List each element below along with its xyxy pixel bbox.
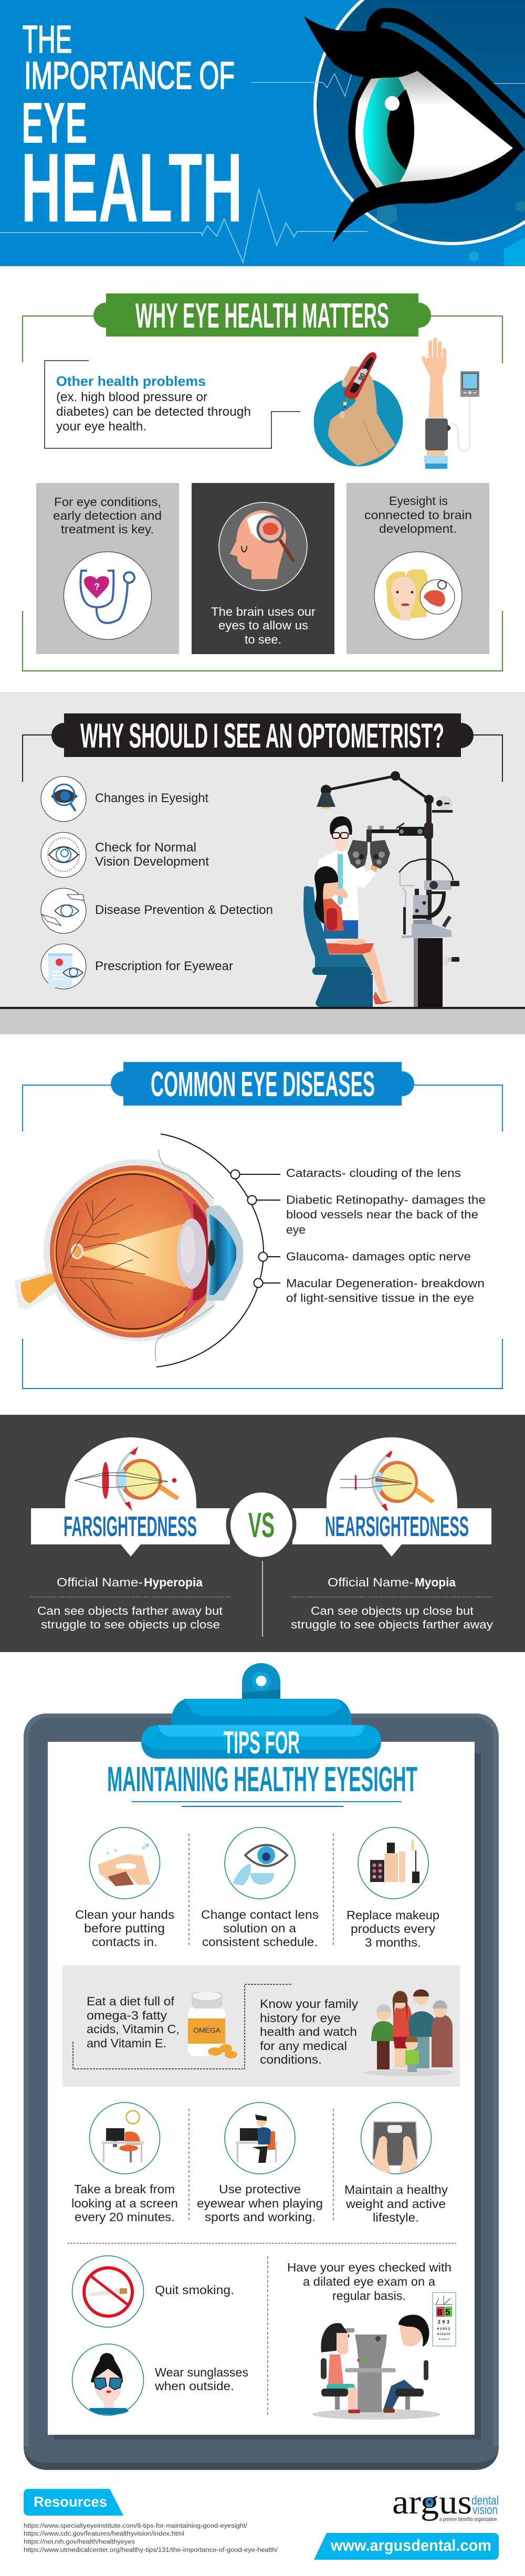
- chart: eye test card: 814236: [437, 2333, 450, 2336]
- tip: take a break: looking at a screen: [71, 2196, 178, 2210]
- icon: farsighted eye diagram: [75, 1449, 180, 1508]
- icon: glucose meter in hands: 90: [356, 372, 367, 382]
- column: farsightedness: Can see objects farther away but: [37, 1604, 223, 1617]
- callout: other health problems: (ex. high blood pressure or: [56, 390, 207, 404]
- panel: why eye health matters: [23, 293, 502, 671]
- list item: changes in eyesight: [41, 776, 208, 822]
- icon: washing hands: [89, 1827, 160, 1899]
- tip: clean hands: contacts in.: [92, 1935, 158, 1949]
- column: farsightedness: [31, 1437, 231, 1631]
- badge: resources: Resources: [34, 2494, 107, 2510]
- list item: prescription for eyewear: Prescription for Eyewear: [95, 959, 233, 973]
- logo: argus dental vision: a premier benefits organization: [439, 2517, 497, 2522]
- panel: diet and family history: [62, 1965, 460, 2087]
- icon: arm with blood pressure monitor: [421, 338, 479, 469]
- callout: other health problems: [45, 361, 300, 448]
- callout: other health problems: Other health problems: [56, 373, 206, 389]
- illustration: optometrist examining patient: [303, 771, 459, 1007]
- tip: quit smoking: [72, 2256, 234, 2327]
- tip: contact lens solution: Change contact lens: [201, 1908, 319, 1921]
- panel: diet and family history: health and watch: [260, 2025, 357, 2038]
- title: THE: [23, 18, 72, 61]
- icon: heartbeat line: [0, 73, 525, 262]
- list item: disease prevention and detection: Disease Prevention & Detection: [95, 903, 273, 917]
- icon: family: [364, 1990, 454, 2076]
- panel: diet and family history: Eat a diet full of: [87, 1994, 174, 2008]
- logo: argus dental vision: vision: [472, 2503, 498, 2517]
- panel: farsightedness vs nearsightedness: [0, 1415, 525, 1652]
- panel: diet and family history: acids, Vitamin C,: [87, 2022, 180, 2036]
- callout: other health problems: your eye health.: [56, 419, 146, 434]
- chart: eye test card: 5: [445, 2307, 450, 2317]
- tip: dilated eye exam: [287, 2260, 456, 2420]
- chart: eye test card: 63952: [437, 2328, 450, 2331]
- column: farsightedness: FARSIGHTEDNESS: [64, 1511, 197, 1542]
- callout: other health problems: diabetes) can be detected through: [56, 405, 251, 419]
- badge: website: [314, 2533, 499, 2560]
- panel: diet and family history: conditions.: [260, 2053, 322, 2066]
- text: resource links: https://www.utmedicalcenter.org/healthy-tips/131/the-importance-of-good-eye-health/: [24, 2547, 278, 2553]
- badge: VS: VS: [248, 1506, 275, 1545]
- icon: feet on scale: [361, 2102, 432, 2174]
- tip: replace makeup: products every: [351, 1922, 435, 1936]
- tip: clean hands: Clean your hands: [75, 1908, 174, 1921]
- tip: protective eyewear: [197, 2102, 323, 2224]
- text: resource links: https://www.specialtyeyeinstitute.com/6-tips-for-maintaining-good-eyesight/: [24, 2523, 248, 2529]
- text: disease list: eye: [286, 1223, 306, 1236]
- icon: glucose meter in hands: [314, 352, 403, 466]
- list item: disease prevention and detection: [41, 888, 273, 933]
- patient and chair: [303, 866, 394, 1007]
- panel: diet and family history: history for eye: [260, 2011, 341, 2025]
- icon: no smoking: [72, 2256, 144, 2327]
- icon: eye with dotted ring: [41, 833, 86, 878]
- badge: website: www.argusdental.com: [330, 2536, 491, 2554]
- slit lamp: [399, 859, 459, 938]
- tip: clean hands: before putting: [84, 1921, 165, 1935]
- tip: contact lens solution: solution on a: [223, 1921, 297, 1935]
- tip: replace makeup: [346, 1827, 439, 1949]
- panel: common eye diseases: [14, 1062, 502, 1389]
- card: brain uses eyes: eyes to allow us: [218, 618, 308, 632]
- panel: diet and family history: Know your family: [260, 1997, 358, 2011]
- text: disease list: [286, 1166, 486, 1305]
- footer: resources: [24, 2489, 278, 2553]
- badge: resources: [24, 2489, 123, 2516]
- card: eyesight and brain development: connected to brain: [364, 508, 472, 522]
- logo: argus dental vision: dental: [471, 2494, 499, 2508]
- icon: stethoscope with heart: [64, 552, 151, 639]
- column: farsightedness: Official Name-: [57, 1575, 143, 1589]
- tip: contact lens solution: consistent schedule.: [202, 1935, 318, 1949]
- panel: tips clipboard: [24, 1663, 499, 2470]
- tip: replace makeup: Replace makeup: [346, 1908, 439, 1922]
- list item: check for normal vision development: Vision Development: [95, 855, 209, 869]
- logo: argus dental vision: argus: [392, 2483, 472, 2521]
- column: nearsightedness: struggle to see objects farther away: [291, 1618, 493, 1631]
- tip: protective eyewear: Use protective: [219, 2182, 301, 2196]
- list item: changes in eyesight: Changes in Eyesight: [95, 791, 208, 805]
- list item: check for normal vision development: Check for Normal: [95, 840, 196, 855]
- card: early detection: early detection and: [53, 509, 162, 522]
- card: brain uses eyes: The brain uses our: [211, 605, 316, 618]
- panel: why should I see an optometrist: [0, 692, 525, 1034]
- icon: woman with brain thought: [374, 552, 462, 639]
- panel: diet and family history: for any medical: [260, 2039, 347, 2053]
- icon: eye and contact lens case: [225, 1827, 295, 1899]
- heading: common eye diseases: [111, 1062, 414, 1106]
- list item: prescription for eyewear: [41, 944, 233, 989]
- tip: healthy weight: weight and active: [345, 2197, 446, 2211]
- tip: protective eyewear: eyewear when playing: [197, 2196, 323, 2210]
- tip: dilated eye exam: a dilated eye exam on a: [303, 2275, 436, 2288]
- icon: omega bottle: [188, 1992, 237, 2058]
- tip: take a break: every 20 minutes.: [75, 2210, 175, 2224]
- tip: contact lens solution: [201, 1827, 319, 1949]
- title: IMPORTANCE OF: [24, 55, 235, 97]
- illustration: eye exam: [312, 2293, 456, 2420]
- icon: magnified eye: [41, 776, 86, 822]
- text: disease list: Diabetic Retinopathy- damages the: [286, 1193, 486, 1206]
- card: brain uses eyes: to see.: [245, 633, 281, 646]
- icon: omega bottle: OMEGA: [193, 2026, 220, 2034]
- text: disease list: of light-sensitive tissue in the eye: [286, 1291, 474, 1305]
- icon: makeup products: [358, 1827, 428, 1899]
- logo: argus dental vision: [392, 2483, 499, 2522]
- hero panel: [0, 0, 525, 266]
- clipboard board: [24, 1713, 499, 2470]
- icon: hands protecting eye: [41, 888, 86, 933]
- tip: dilated eye exam: regular basis.: [332, 2289, 406, 2302]
- card: early detection: [36, 483, 179, 654]
- card: eyesight and brain development: Eyesight is: [389, 494, 448, 508]
- diagram: callout arc with markers: [156, 1134, 280, 1367]
- column: nearsightedness: Myopia: [415, 1575, 456, 1589]
- column: farsightedness: Hyperopia: [144, 1575, 203, 1589]
- card: eyesight and brain development: [346, 483, 489, 654]
- tip: replace makeup: 3 months.: [365, 1936, 421, 1949]
- tip: wear sunglasses: when outside.: [154, 2379, 234, 2393]
- heading: why eye health matters: [93, 293, 431, 337]
- chart: eye test card: 8: [437, 2307, 442, 2317]
- icon: nearsighted eye diagram: [340, 1452, 435, 1510]
- card: brain uses eyes: [192, 483, 334, 654]
- column: farsightedness: struggle to see objects up close: [41, 1618, 220, 1631]
- column: nearsightedness: Can see objects up close but: [311, 1604, 474, 1617]
- tip: wear sunglasses: [72, 2344, 248, 2415]
- tip: healthy weight: Maintain a healthy: [344, 2183, 448, 2196]
- tip: clean hands: [75, 1827, 174, 1949]
- card: eyesight and brain development: development.: [379, 522, 457, 535]
- title: EYE: [22, 91, 87, 155]
- list item: check for normal vision development: [41, 833, 209, 878]
- chart: eye test card: 293: [438, 2319, 449, 2325]
- icon: stethoscope with heart: ?: [94, 582, 100, 592]
- icon: man working at desk: [225, 2102, 295, 2174]
- tip: wear sunglasses: Wear sunglasses: [155, 2365, 248, 2379]
- tip: healthy weight: [344, 2102, 448, 2224]
- text: disease list: Glaucoma- damages optic nerve: [286, 1250, 471, 1263]
- card: early detection: treatment is key.: [61, 522, 154, 536]
- text: disease list: Macular Degeneration- breakdown: [286, 1277, 485, 1290]
- icon: head with magnifier on brain: [219, 502, 307, 591]
- panel: diet and family history: and Vitamin E.: [87, 2036, 166, 2050]
- tip: quit smoking: Quit smoking.: [155, 2283, 234, 2297]
- text: resource links: [24, 2523, 278, 2553]
- icon: prescription sheet and eye: [41, 944, 86, 989]
- clip with heading: tips for: [141, 1663, 381, 1760]
- chart: eye test card: 538964: [439, 2338, 449, 2340]
- illustration: large eye: [304, 8, 525, 243]
- column: nearsightedness: Official Name-: [328, 1575, 414, 1589]
- text: disease list: blood vessels near the back of the: [286, 1208, 478, 1221]
- tip: take a break: [71, 2102, 178, 2224]
- chart: eye test card: [433, 2293, 456, 2346]
- phoropter: [348, 840, 390, 869]
- icon: woman with sunglasses: [72, 2344, 144, 2415]
- tip: take a break: Take a break from: [74, 2182, 175, 2196]
- clip with heading: tips for: TIPS FOR: [224, 1725, 300, 1760]
- title: [21, 18, 243, 243]
- panel: diet and family history: omega-3 fatty: [87, 2009, 167, 2022]
- text: resource links: https://www.cdc.gov/features/healthyvision/index.html: [24, 2531, 184, 2537]
- doctor: [318, 816, 378, 939]
- tip: protective eyewear: sports and working.: [205, 2210, 316, 2224]
- title: HEALTH: [21, 133, 243, 243]
- text: resource links: https://nei.nih.gov/health/healthyeyes: [24, 2539, 135, 2545]
- illustration: eye anatomy cross-section: [14, 1150, 243, 1361]
- icon: desk with clock: [89, 2102, 160, 2174]
- tip: healthy weight: lifestyle.: [373, 2211, 419, 2224]
- tip: dilated eye exam: Have your eyes checked with: [287, 2260, 452, 2274]
- card: early detection: For eye conditions,: [54, 495, 161, 509]
- badge: VS: [226, 1490, 296, 1559]
- text: disease list: Cataracts- clouding of the lens: [286, 1166, 461, 1180]
- column: nearsightedness: [291, 1437, 493, 1631]
